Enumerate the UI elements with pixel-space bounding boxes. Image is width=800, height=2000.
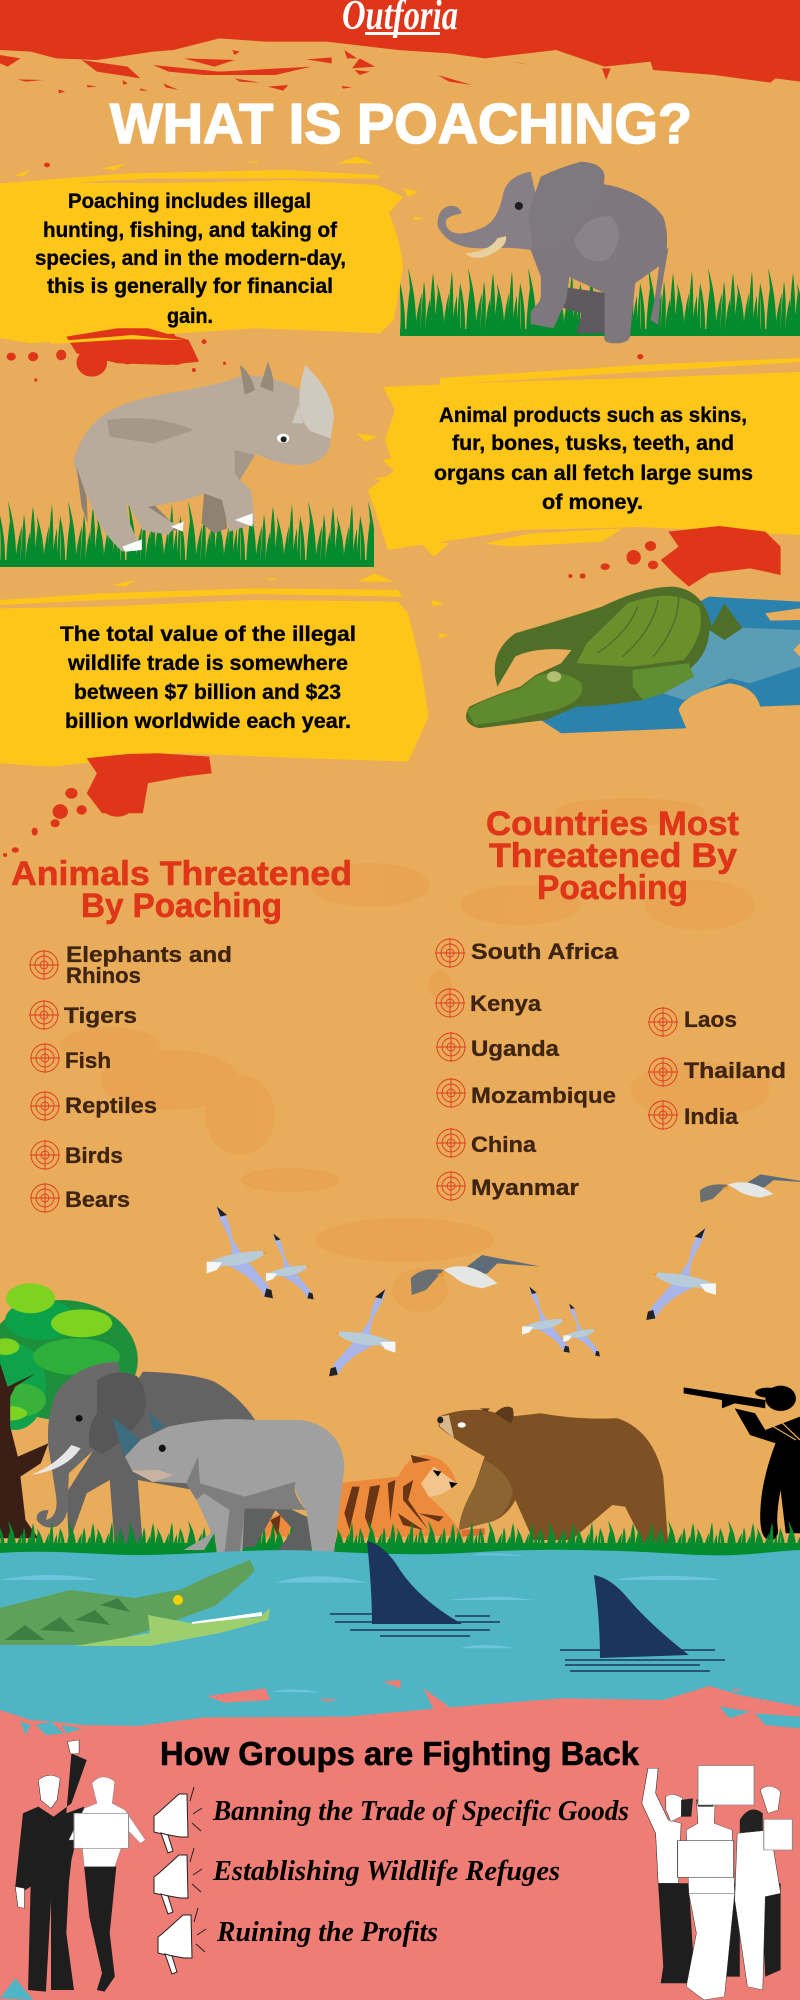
item: wildlife refuges	[154, 1848, 560, 1914]
item: ruining profits	[158, 1908, 438, 1974]
list: countries column one: Uganda	[471, 1036, 560, 1061]
animal products text: of money.	[542, 491, 643, 514]
icon: tiger	[263, 1455, 485, 1538]
trade value text: wildlife trade is somewhere	[67, 652, 348, 675]
list: animals: Tigers	[64, 1003, 137, 1028]
water highlights	[0, 1554, 724, 1770]
water	[0, 1550, 800, 1740]
animal products text	[434, 404, 753, 514]
list: countries column two: Laos	[684, 1007, 737, 1032]
list: countries column two: Thailand	[684, 1058, 786, 1083]
red splatter over panel edge	[51, 328, 199, 365]
icon: crocodile in water	[0, 1560, 270, 1646]
definition text: this is generally for financial	[47, 275, 333, 298]
definition text: species, and in the modern-day,	[35, 247, 346, 270]
trade value text: The total value of the illegal	[60, 623, 356, 646]
icon: large elephant	[31, 1362, 255, 1547]
heading: countries threatened: Threatened By	[489, 837, 737, 875]
list: animals: Elephants and	[66, 942, 232, 967]
trade value text: between $7 billion and $23	[74, 681, 341, 704]
list: countries column one: South Africa	[471, 939, 619, 964]
background paint splatter	[60, 798, 770, 1312]
heading: animals threatened: Animals Threatened	[11, 855, 352, 893]
red splatter near crocodile	[568, 354, 781, 587]
list: countries column two	[648, 1007, 786, 1130]
trade value text: billion worldwide each year.	[65, 710, 351, 733]
icon: elephant	[438, 162, 668, 343]
header band	[0, 0, 800, 93]
red splatter under third panel	[3, 753, 212, 857]
icon: bear	[437, 1407, 668, 1547]
trade value text	[60, 623, 356, 733]
panel: trade value	[0, 573, 449, 767]
animal products text: organs can all fetch large sums	[434, 462, 753, 485]
heading: countries threatened	[486, 805, 739, 907]
red splatter under first panel	[7, 163, 226, 382]
definition text: gain.	[167, 305, 213, 328]
item: banning trade	[154, 1787, 629, 1853]
icon: shark fin right	[560, 1575, 725, 1671]
item: ruining profits: Ruining the Profits	[216, 1917, 438, 1948]
icon: protesters left	[15, 1740, 145, 1992]
animal products text: fur, bones, tusks, teeth, and	[452, 432, 734, 455]
heading: animals threatened	[11, 855, 352, 925]
list: animals	[29, 942, 232, 1213]
item: wildlife refuges: Establishing Wildlife Refuges	[212, 1856, 560, 1887]
heading: animals threatened: By Poaching	[81, 887, 282, 925]
definition text: Poaching includes illegal	[68, 190, 311, 213]
icon: protesters right	[642, 1766, 792, 2000]
list: animals: Fish	[65, 1048, 111, 1073]
panel: animal products	[357, 358, 800, 557]
heading: countries threatened: Poaching	[537, 869, 688, 907]
icon: shark fin left	[330, 1541, 500, 1636]
tree	[0, 1283, 138, 1538]
heading: fighting back: How Groups are Fighting Back	[160, 1735, 640, 1772]
title: WHAT IS POACHING?	[110, 92, 692, 156]
list: animals: Birds	[65, 1143, 123, 1168]
list: countries column two: India	[684, 1104, 739, 1129]
list: countries column one: Myanmar	[471, 1175, 579, 1200]
icon: grey rhino	[112, 1412, 344, 1553]
item: banning trade: Banning the Trade of Specific Goods	[212, 1796, 629, 1827]
panel: definition	[0, 157, 423, 343]
list: countries column one: Mozambique	[471, 1083, 616, 1108]
icon: crocodile with pond	[466, 587, 800, 733]
animal products text: Animal products such as skins,	[439, 404, 747, 427]
grass under rhino	[0, 496, 374, 567]
list: animals: Bears	[65, 1187, 130, 1212]
list: animals: Rhinos	[66, 963, 141, 988]
heading: countries threatened: Countries Most	[486, 805, 739, 843]
list: animals: Reptiles	[65, 1093, 157, 1118]
definition text: hunting, fishing, and taking of	[43, 219, 338, 242]
definition text	[35, 190, 346, 328]
grass under elephant	[400, 263, 800, 336]
long grass strip	[0, 1518, 800, 1556]
list: countries column one	[435, 938, 619, 1201]
list: countries column one: China	[471, 1132, 537, 1157]
icon: hunter silhouette	[684, 1386, 800, 1540]
flock of birds	[207, 1174, 800, 1376]
icon: rhino	[74, 362, 334, 552]
panel: fighting back	[0, 1680, 800, 2000]
list: countries column one: Kenya	[470, 991, 542, 1016]
